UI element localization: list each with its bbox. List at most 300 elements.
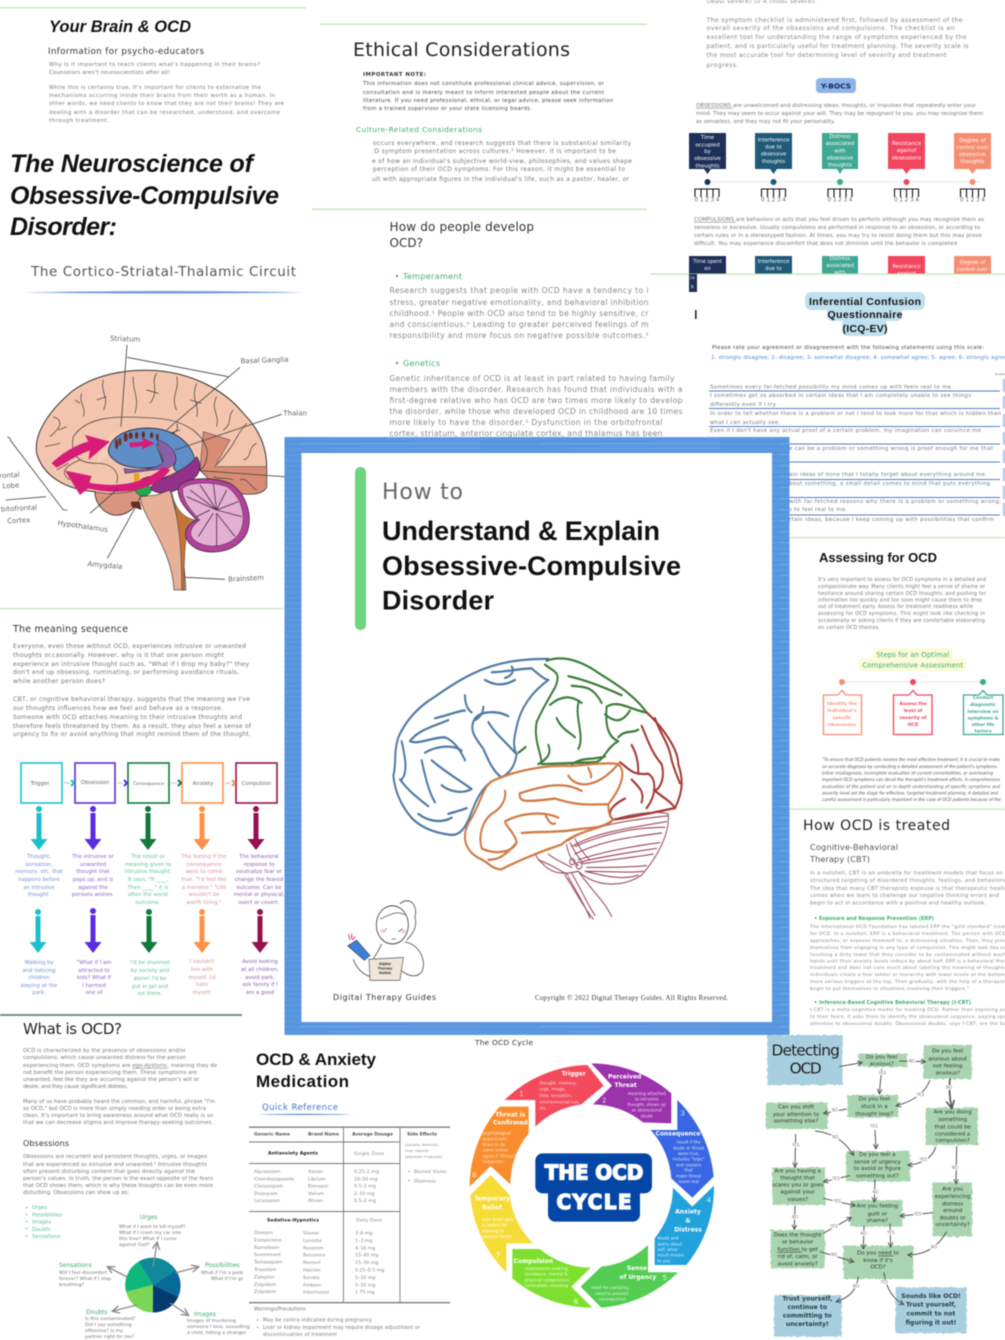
warnings and precautions: discontinuation of treatment (263, 1332, 337, 1338)
node: sense of urgency: to avoid or figure (854, 1166, 902, 1172)
brain anatomy diagram: Hypothalamus (57, 519, 109, 534)
node: need to know: Do you need to (857, 1251, 900, 1257)
heading: the OCD cycle: The OCD Cycle (474, 1038, 533, 1047)
flow labels: NO (832, 1108, 838, 1113)
compulsion scale cards cut off: Interference (758, 259, 789, 265)
panel: how do people develop OCD: OCD? (390, 236, 423, 250)
text block: assessing for OCD: hesitance around sharing certain OCD thoughts, and pushing for (818, 591, 987, 597)
medication table: Brand Name (308, 1132, 339, 1138)
node: distress around doubts: around (943, 1208, 962, 1214)
flow labels: YES (887, 1230, 895, 1235)
segment: sense of urgency: consequence (598, 1297, 626, 1302)
flow labels: YES (879, 1070, 887, 1075)
cover: coloured brain illustration (393, 658, 682, 919)
text block: meaning sequence intro: thoughts occasionally. However, why is it that one person might (13, 652, 225, 659)
quote: comprehensive assessment: "To ensure that OCD patients receive the most effective treatment, it is crucial to make (822, 757, 1000, 762)
examples row: at all children, (241, 967, 279, 973)
table rows: questionnaire statements: In order to tell whether there is a problem or not I tend to look more for that which is hidden than (710, 411, 1001, 417)
examples row (21, 959, 279, 997)
flow labels: NO (931, 1244, 937, 1249)
scale card: degree of control (954, 133, 991, 185)
segment: sense of urgency: need for certainty, (591, 1285, 630, 1290)
scale card: interference: due to (765, 144, 782, 150)
text block: CBT: comes when we learn to challenge our negative thinking errors and (810, 893, 999, 899)
medication table: Alprazolam (254, 1169, 281, 1175)
segment: consequence: 3 (680, 1109, 685, 1118)
segment: sense of urgency: Sense (627, 1265, 647, 1272)
badge: ICQ-EV title: Questionnaire (828, 309, 903, 321)
heading: what is OCD: What is OCD? (23, 1020, 122, 1038)
medication table: Ativan (308, 1198, 323, 1204)
segment: perceived threat: as obsessional (631, 1108, 662, 1113)
medication table: Rozerem (303, 1246, 324, 1252)
segment: threat is confirmed: again if "threat" (483, 1153, 516, 1158)
flow labels: NO (952, 1165, 958, 1170)
medication table: Triazolam (253, 1267, 277, 1273)
text block: ERP: for OCD. In a nutshell, ERP is a behavioral treatment. The person with OCD (810, 931, 1005, 937)
segment: compulsion: physical compulsions, (525, 1277, 570, 1282)
title box: detecting OCD: OCD (790, 1060, 822, 1078)
definitions row: a monster." "Life (182, 885, 226, 891)
flow arrows (794, 1061, 957, 1304)
pie label: urges: Urges (140, 1214, 157, 1221)
down arrows row one (30, 806, 264, 850)
step: identify obsessions: individual's (827, 708, 857, 714)
segment: compulsion: Compulsion (514, 1258, 553, 1265)
examples row: rot there. (138, 991, 163, 997)
text block: why teach clients: other words, we need clients to know that they are not their brains! They are (49, 101, 285, 107)
node: anxious about not feeling anxious: not feeling (933, 1064, 962, 1070)
medication table: Lunesta (303, 1238, 322, 1244)
text block: symptom checklist: patient, and is particularly useful for treatment planning. The severity scale is (706, 43, 968, 50)
medication table: Belsomra (303, 1252, 325, 1258)
scale card: degree of control: control over (956, 145, 989, 151)
medication table: Eszopiclone (254, 1238, 282, 1244)
text block: OCD definition: so OCD," but OCD is more than simply needing order or being extra (23, 1106, 206, 1112)
medication table: Zaleplon (254, 1274, 274, 1280)
pie label: possibilities: What if I'm a pedophile? (201, 1270, 258, 1276)
segment: sense of urgency: need to prevent (595, 1291, 629, 1296)
down arrows row two (30, 908, 268, 953)
node: doing a compulsion: considered a (935, 1131, 970, 1137)
text block: obsessions definition: person's values. In truth, the person is the exact opposite of the fears (23, 1176, 213, 1182)
text block: rating instructions (711, 345, 1005, 376)
badge: Y-BOCS (816, 78, 856, 93)
medication table: Single Dose (354, 1151, 384, 1157)
examples row: avoid park, (245, 975, 275, 981)
text block: ERP: approaches, or exposes themself to, a distressing situation. Then, they prev (810, 938, 1005, 944)
flow labels: NO (873, 1189, 879, 1194)
text block: I-CBT: attention to obsessional doubts. Obsessional doubts, says I-CBT, are the ba (810, 1021, 1005, 1027)
segment: compulsion: 6 (574, 1297, 579, 1306)
subheading: culture-related considerations: Culture-Related Considerations (356, 125, 482, 134)
panel: the meaning sequence (12, 624, 285, 997)
node: need to know: know if it's (863, 1258, 893, 1264)
pie label: images: a child, hitting a stranger (187, 1330, 246, 1336)
cover: title block: Obsessive-Compulsive (382, 551, 681, 581)
node: anxious about not feeling anxious: Do you feel (932, 1049, 964, 1055)
medication table: Zolpidem (254, 1289, 277, 1295)
compulsion scale cards cut off: Time spent (692, 259, 722, 265)
node: shift your attention (766, 1102, 828, 1129)
text block: meaning sequence intro: experience an intrusive thought such as, "What if I drop my baby?" they (13, 661, 249, 668)
step: diagnostic interview: symptoms & (968, 716, 999, 722)
heading: OCD and anxiety medication: Medication (256, 1072, 349, 1091)
node: sense of urgency: something out? (856, 1173, 899, 1179)
quote: comprehensive assessment: important OCD symptoms can derail the therapist's treatment efforts. A comprehensive (822, 777, 1000, 782)
segment: threat is confirmed: same action (483, 1148, 508, 1153)
text block: meaning sequence intro: CBT, or cognitive behavioral therapy, suggests that the meaning we I've (13, 696, 250, 703)
quote: comprehensive assessment: careful assessment is particularly important in the case of OCD patients because of the (822, 797, 1001, 802)
brain anatomy diagram: Basal Ganglia (240, 356, 289, 365)
segment: compulsion (512, 1249, 592, 1308)
text block: OCD definition: not benefit the person experiencing them. These symptoms are (23, 1070, 198, 1076)
text block: meaning sequence intro: Someone with OCD attaches meaning to their intrusive thoughts and (13, 714, 242, 721)
text block: compulsions definition: certain rules or in a stereotyped fashion. At times, you may try to resist doing them but this may prove (694, 233, 983, 239)
node: distress around doubts: distress (942, 1201, 963, 1207)
scale card: time occupied: occupied (695, 142, 720, 148)
scale card: interference: thoughts (762, 159, 785, 165)
table rows: questionnaire statements: s to feel real to me. (789, 507, 847, 513)
node: function to get rid of anxiety: avoid anxiety? (778, 1261, 818, 1267)
text block: ERP: hands until their anxiety levels reduce by about half. ERP is a behavioral ther (810, 958, 1005, 964)
scale card: interference: obsessive (761, 152, 786, 158)
table rows: questionnaire statements: differently even if I try. (710, 402, 777, 408)
text block: assessing for OCD: assessing for OCD symptoms. This might look like checking in (818, 611, 985, 617)
compulsion scale cards cut off: on (704, 266, 711, 272)
text block: ERP: The International OCD Foundation has labeled ERP the "gold standard" treat (809, 924, 1005, 930)
node: stuck in a thought loop: thought loop? (855, 1111, 893, 1117)
examples row: alone! I'd be (133, 976, 167, 982)
text block: genetics: cortex, striatum, anterior cingulate cortex, and thalamus has been (390, 429, 663, 438)
table rows: questionnaire statements: bout something, a small detail comes to mind that puts everything (789, 481, 990, 487)
text block: CBT: The idea that many CBT therapists espouse is that therapeutic healin (809, 886, 1005, 892)
callout: steps for optimal assessment (859, 648, 966, 671)
flow labels: YES (870, 1124, 878, 1129)
scale card: resistance: Resistance (892, 141, 922, 147)
heading: OCD and anxiety medication: OCD & Anxiety (256, 1050, 377, 1069)
segment: consequence: includes "logic" (673, 1157, 705, 1162)
definitions row: Then ____." It is (127, 885, 169, 891)
definitions row: memory, etc. that (15, 869, 63, 875)
brain anatomy diagram (0, 335, 307, 590)
text block: meaning sequence intro: urgency to fix or avoid anything that might remind them of the thought. (13, 731, 251, 738)
node: doing a compulsion (926, 1108, 978, 1145)
sequence box: anxiety (182, 763, 223, 803)
flow labels: YES (917, 1092, 925, 1097)
text block: culture considerations: :D symptom presentation across cultures.¹ However, it is important to be (372, 148, 616, 155)
text block: meaning sequence intro (13, 643, 252, 738)
step: identify obsessions: obsessions (828, 722, 856, 728)
node: doing a compulsion: compulsion? (935, 1138, 970, 1144)
medication table: attention if persist) (405, 1154, 443, 1159)
node: thought that scares you (772, 1167, 825, 1205)
step: diagnostic interview: interview on (968, 709, 998, 715)
segment: trigger: environmental cue, (539, 1099, 580, 1104)
node: stuck in a thought loop (848, 1095, 898, 1118)
definitions row: thought. (28, 892, 51, 898)
definitions row: against the (78, 885, 108, 891)
medication table: Lorazepam (254, 1198, 280, 1204)
subheading: temperament: Temperament (402, 272, 462, 281)
medication table: Side Effects (407, 1132, 437, 1138)
text block: meaning sequence intro: while another person does? (13, 678, 105, 685)
panel: detecting OCD flowchart (766, 1035, 978, 1337)
text block: OCD definition: OCD is characterized by the presence of obsessions and/or (23, 1048, 187, 1054)
flow labels: NO (831, 1252, 837, 1257)
quote: comprehensive assessment: Initial misdiagnosis, incomplete evaluation of current comorbidities, or overlooking (822, 770, 993, 776)
heading: the meaning sequence: The meaning sequence (12, 624, 128, 635)
scale card: distress: thoughts (828, 162, 852, 168)
text block: important note: from a trained supervisor or your state licensing boards. (363, 106, 532, 112)
node: distress around doubts: doubts or (940, 1215, 966, 1221)
flow labels: YES (914, 1211, 922, 1216)
quote: comprehensive assessment: an accurate diagnosis by conducting a detailed assessment of the patient's symptoms. (822, 764, 998, 769)
text block: assessing for OCD: on certain OCD themes. (818, 625, 880, 631)
examples row: I couldn't (190, 959, 214, 965)
callout: steps for optimal assessment: Steps for an Optimal (876, 651, 949, 659)
table rows: questionnaire statements: what I can actually see. (710, 420, 780, 426)
warnings and precautions: Warnings/Precautions (254, 1306, 306, 1312)
callout: steps for optimal assessment: Comprehensive Assessment (862, 662, 963, 670)
segment: trigger: thought, memory, (539, 1080, 577, 1085)
brain anatomy diagram: Striatum (110, 335, 141, 344)
node: thought that scares you: scares you or goes (772, 1183, 824, 1189)
list: obsession types: Sensations (32, 1234, 61, 1240)
scale card: resistance (888, 133, 925, 185)
text block: compulsions definition (694, 217, 984, 247)
subheading: I-CBT: Inference-Based Cognitive Behavioral Therapy (I-CBT) (819, 1000, 971, 1006)
table rows: questionnaire statements: e can be a problem or something wrong is proof enough for me that (789, 446, 993, 452)
definitions row: thought that (76, 869, 110, 875)
panel: assessing for OCD (789, 550, 1005, 810)
text block: obsessions definition: mind. They may seem to occur against your will. They may be repugnant to you, you may recognize them (696, 111, 983, 117)
segment: compulsion: rumination, counting (525, 1283, 569, 1288)
node: distress around doubts: Are you (942, 1187, 963, 1193)
subheading: CBT: Cognitive-Behavioral (810, 842, 898, 852)
pie label: images: Images (194, 1311, 216, 1318)
text block: culture considerations (372, 140, 632, 183)
pie label: sensations: breathing? (59, 1282, 85, 1288)
text block: assessing for OCD: occasionally or asking clients if they are comfortable elaborating (818, 618, 985, 624)
scale card: interference (755, 133, 792, 185)
node: function to get rid of anxiety: rid of, calm, or (778, 1254, 818, 1260)
medication table: Antianxiety Agents (268, 1150, 318, 1156)
definitions row: worth living." (186, 900, 222, 906)
sequence box: consequence: Consequence (133, 781, 164, 787)
segment: consequence: Consequence (656, 1130, 700, 1137)
pie label: doubts: offensive? Is my (85, 1328, 123, 1334)
node: thought that scares you: values? (787, 1197, 808, 1203)
title box: detecting OCD: Detecting (771, 1042, 840, 1060)
segment: trigger: urge, image, (539, 1087, 566, 1092)
outcome: trust yourself: continue to (788, 1304, 827, 1311)
segment: threat is confirmed: reappears (483, 1159, 504, 1164)
list: obsession types: Urges (32, 1205, 47, 1211)
segment: perceived threat (591, 1063, 671, 1123)
text block: temperament: childhood.¹ People with OCD also tend to be highly sensitive, cr (390, 309, 649, 318)
text block: genetics: the disorder, while those who developed OCD in childhood are 10 times (390, 407, 683, 416)
flow labels: NO (832, 1134, 838, 1139)
examples row: myself. (193, 990, 212, 996)
pie label: urges: What if I crash my car into (119, 1230, 181, 1236)
title: the neuroscience of OCD: The Neuroscience of (10, 150, 256, 178)
flow labels: NO (946, 1085, 952, 1090)
definitions row: unwanted (80, 862, 106, 868)
brain anatomy diagram: Brainstem (228, 574, 264, 584)
text block: why teach clients: mechanisms occurring inside their brains from their worth as a human. In (49, 93, 275, 99)
definitions row: It says, "If ____, (128, 877, 169, 883)
step: assess severity: severity of (899, 715, 927, 721)
medication table: Klonopin (308, 1184, 328, 1190)
panel: your brain and OCD (0, 7, 306, 124)
text block: meaning sequence intro: therefore feels threatened by them. As a result, they also feel a sense of (13, 723, 252, 730)
node: doing a compulsion: that could be (934, 1124, 971, 1130)
step: identify obsessions: Identify the (827, 701, 857, 707)
medication table: 1–3 mg (355, 1238, 372, 1244)
node: anxious about not feeling anxious: anxious? (936, 1071, 960, 1077)
segment: threat is confirmed: Confirmed (493, 1120, 528, 1127)
medication table: Sedative-Hypnotics (267, 1218, 319, 1224)
medication table: Sonata (303, 1275, 320, 1281)
badge: ICQ-EV title: Inferential Confusion (809, 296, 921, 308)
examples row: hate (196, 982, 208, 988)
heading: assessing for OCD: Assessing for OCD (819, 550, 937, 565)
text block: important note: This information does not constitute professional clinical advice, supervision, or (362, 81, 605, 87)
brain anatomy diagram: Amygdala (87, 560, 123, 571)
cycle diagram (470, 1063, 714, 1308)
definitions row: The intrusive or (71, 854, 115, 860)
node: doing a compulsion: Are you doing (934, 1110, 972, 1116)
medication table: Dizziness (414, 1178, 436, 1184)
heading: how OCD is treated: How OCD is treated (803, 818, 950, 834)
text block: CBT: begin to act in accordance with a positive and healthy outlook. (810, 900, 986, 906)
timeline connector (845, 681, 985, 683)
segment: threat is confirmed: 8 (472, 1171, 477, 1180)
segment: perceived threat: to intrusive (635, 1096, 659, 1101)
flow labels: NO (853, 1283, 859, 1288)
text block: assessing for OCD: out of treatment early. Assess for treatment readiness while (818, 604, 973, 610)
sequence box: obsession: Obsession (81, 780, 110, 786)
text block: rating instructions: 1- strongly disagree; 2- disagree; 3- somewhat disagree; 4- somewhat agree; 5- agree; 6- strongly agree (711, 355, 1005, 361)
pie label: doubts: Doubts (86, 1309, 107, 1316)
text block: obsessions definition: often present disturbing content that goes directly against the (23, 1169, 196, 1175)
text block: important note: literature. If you need professional, ethical, or legal advice, please seek information (363, 98, 613, 104)
node: need to know: OCD? (870, 1265, 886, 1271)
definitions row: response to (243, 862, 275, 868)
scale card: time occupied: Time (700, 135, 715, 141)
outcome: trust yourself: Trust yourself, (782, 1295, 832, 1302)
medication table: 10–50 mg (354, 1176, 377, 1182)
medication table: Intermezzo (303, 1290, 329, 1296)
compulsion scale cards cut off: due to (765, 266, 782, 272)
medication table: Average Dosage (352, 1132, 393, 1138)
center badge: the OCD cycle: THE OCD (545, 1161, 643, 1185)
table rows: questionnaire statements: Sometimes every far-fetched possibility my mind comes up with feels real to me. (710, 384, 953, 390)
text block: meaning sequence intro: Everyone, even those without OCD, experiences intrusive or unwanted (13, 643, 246, 650)
segment: temporary relief: remove threat (482, 1234, 512, 1239)
text block: obsessions definition: as senseless, and they may not fit your personality. (696, 119, 835, 125)
medication table: 0.5–2 mg (354, 1198, 376, 1204)
segment: temporary relief (470, 1175, 533, 1272)
step: assess severity: Assess the (899, 701, 927, 707)
text block: OCD definition (23, 1048, 217, 1126)
segment: trigger (505, 1065, 604, 1127)
node: function to get rid of anxiety (771, 1230, 825, 1268)
medication table: Halcion (303, 1268, 320, 1274)
segment: trigger: Trigger (562, 1071, 586, 1078)
chevrons between boxes (64, 780, 235, 786)
text block: ERP (809, 924, 1005, 992)
medication table: (usually diminish, (405, 1142, 439, 1147)
step: identify obsessions (824, 679, 862, 734)
panel: how do people develop OCD (390, 220, 683, 438)
segment: sense of urgency: of Urgency (620, 1274, 656, 1281)
examples row: park. (32, 990, 46, 996)
compulsion scale cards cut off: against (897, 271, 916, 277)
definitions row: outcome. (136, 900, 161, 906)
text block: CBT: structured targeting of disordered thoughts, feelings, and behaviors. (810, 878, 1005, 884)
node: guilt or shame: guilt or (868, 1211, 888, 1217)
step: diagnostic interview: other life (972, 722, 994, 728)
text block: why teach clients: dealing with a disorder that can be researched, understood, and overcome (49, 110, 281, 116)
medication table: Restoril (303, 1260, 321, 1266)
title: the neuroscience of OCD (10, 150, 279, 241)
text block: obsessions definition: that are experienced as intrusive and unwanted.¹ Intrusive thoughts (23, 1161, 207, 1168)
segment: consequence: seem real (678, 1179, 699, 1184)
brain anatomy diagram: Thalan (282, 410, 307, 418)
flow labels: YES (792, 1143, 800, 1148)
examples row: myself. I'd (188, 975, 216, 981)
definitions row: wouldn't be (189, 892, 219, 898)
pie label: images: Images of murdering (187, 1318, 236, 1324)
subheading: obsessions: Obsessions (23, 1139, 69, 1148)
cover: copyright: Copyright © 2022 Digital Therapy Guides. All Rights Reserved. (535, 995, 728, 1002)
subheading: quick reference (258, 1103, 354, 1115)
definitions row: true. "I'd feel like (181, 877, 227, 883)
node: shift your attention: Can you shift (778, 1105, 815, 1111)
segment: anxiety and distress: Distress (674, 1226, 702, 1233)
occipital lobe lines (610, 712, 682, 820)
warnings and precautions: May be contra indicated during pregnancy (263, 1318, 372, 1324)
medication table: Blurred Vision (414, 1169, 447, 1175)
text block: why teach clients: While this is certainly true, it's important for clients to externalize the (49, 85, 262, 91)
scale card: distress: with (834, 148, 846, 154)
text block: symptom checklist: progress. (706, 62, 739, 69)
text block: OCD definition: clean. It's important to bring awareness around what OCD really is so (23, 1113, 213, 1119)
segment: anxiety and distress: to you (657, 1258, 671, 1263)
panel: OCD and anxiety medication (249, 1050, 450, 1338)
text block: I-CBT: I-CBT is a meta-cognitive model for treating OCD. Rather than exposing pe (810, 1007, 1005, 1013)
list: obsession types: Images (32, 1220, 51, 1226)
definitions row: mental or physical, (234, 892, 285, 898)
segment: anxiety and distress (655, 1186, 714, 1265)
definitions row: intrusive thought. (124, 869, 172, 875)
node: thought that scares you: against your (781, 1190, 816, 1196)
node: need to know (843, 1246, 913, 1279)
segment: consequence: result if the (677, 1140, 701, 1145)
text block: OCD definition: unwanted, feel like they are occurring against the person's will or (23, 1077, 200, 1083)
quote: comprehensive assessment: evaluation of the patient and an in-depth understanding of specific symptoms and (822, 784, 1000, 789)
segment: consequence: doubt or threat (673, 1145, 705, 1150)
compulsion scale cards cut off: Degree of (960, 260, 985, 266)
badge: ICQ-EV title: (ICQ-EV) (842, 323, 888, 335)
brain anatomy diagram: Lobe (2, 481, 20, 490)
node: doing a compulsion: something (938, 1117, 967, 1123)
panel: ethical considerations (312, 24, 683, 438)
text block: culture considerations: occurs everywhere, and research suggests that there is substantial similarity (373, 140, 631, 147)
compulsion scale cards cut off (688, 255, 992, 274)
